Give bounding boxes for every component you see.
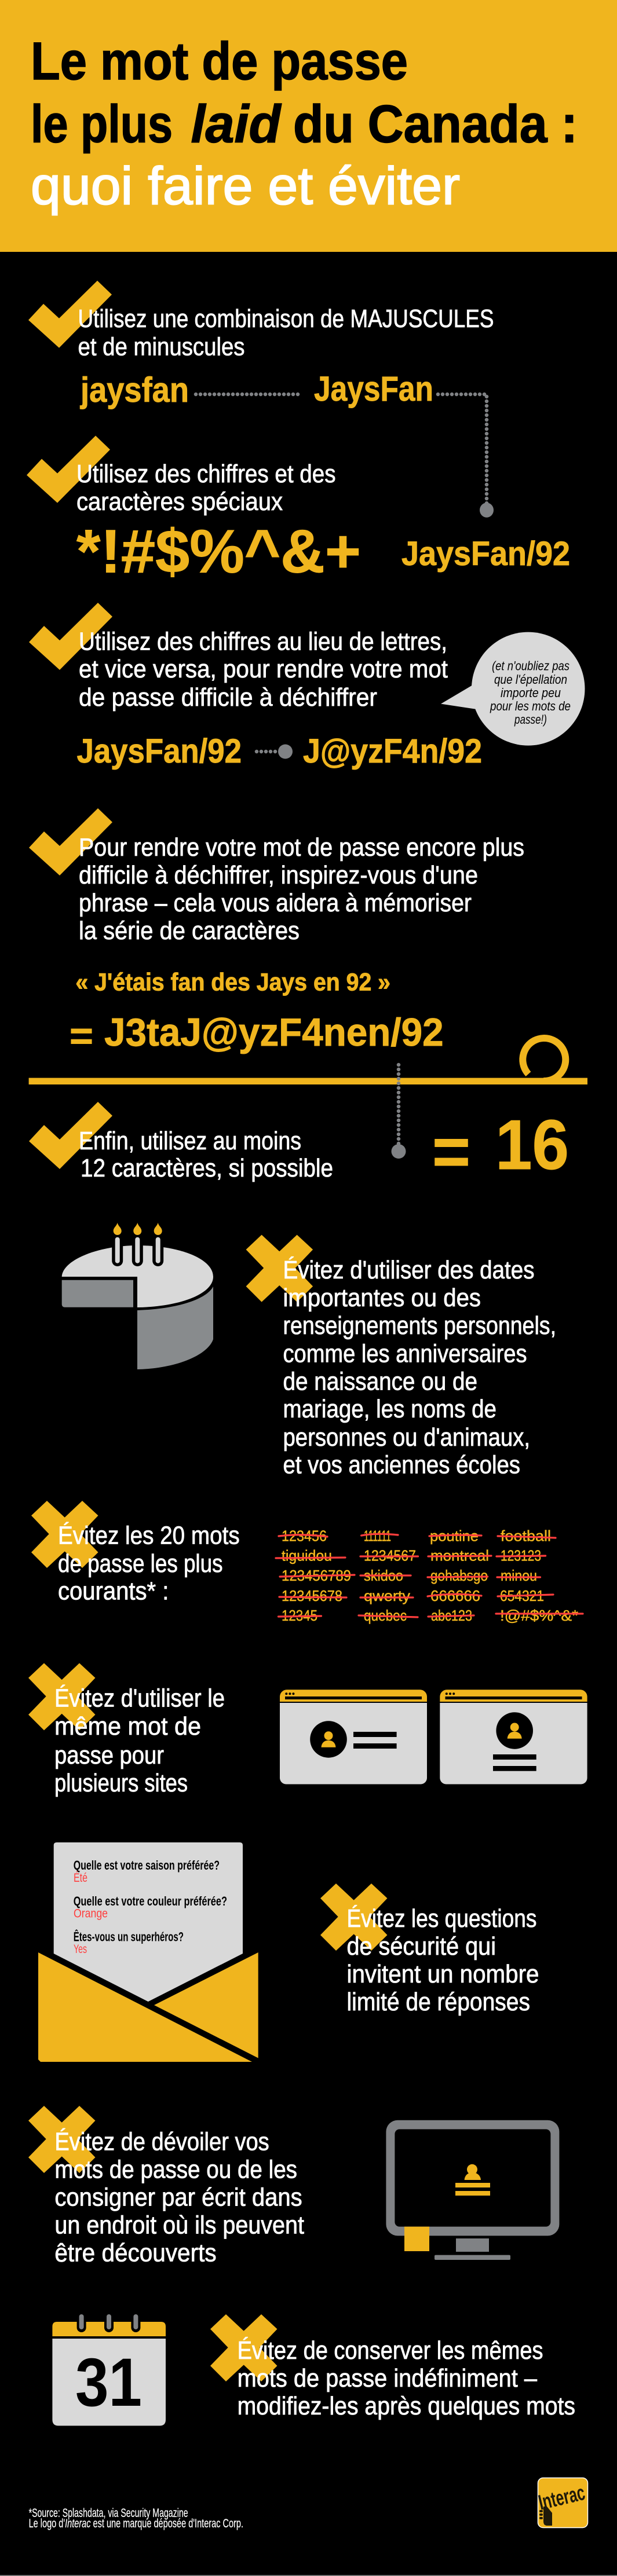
- tip text: Évitez de dévoiler vos: [54, 2127, 269, 2156]
- icon: X mark: [320, 1884, 387, 1951]
- tip text: mots de passe indéfiniment –: [238, 2364, 537, 2392]
- tip text: invitent un nombre: [346, 1960, 539, 1988]
- icon: browser window 2: [440, 1690, 587, 1784]
- tip text: Utilisez des chiffres au lieu de lettres,: [79, 628, 447, 655]
- source footnote: Le logo d'Interac est une marque déposée d'Interac Corp.: [29, 2517, 243, 2530]
- crossed-out password list: poutine: [430, 1527, 479, 1545]
- tip text: de passe difficile à déchiffrer: [79, 683, 377, 712]
- crossed-out password list: football: [501, 1527, 551, 1545]
- crossed-out password list: gohabsgo: [430, 1567, 488, 1584]
- special characters: *!#$%^&+: [76, 518, 361, 586]
- big number 16: [432, 1105, 569, 1190]
- tip text: et vice versa, pour rendre votre mot: [79, 655, 448, 683]
- title: [31, 32, 578, 216]
- tip text: mots de passe ou de les: [54, 2155, 297, 2184]
- tip 1: uppercase and lowercase: [28, 281, 494, 518]
- tip text: [79, 833, 524, 945]
- tip text: [54, 2127, 304, 2267]
- quote phrase: « J'étais fan des Jays en 92 »: [75, 968, 390, 996]
- tip text: [54, 1684, 225, 1797]
- Interac logo: Interac: [536, 2480, 587, 2515]
- example: JaysFan/92: JaysFan/92: [401, 535, 570, 573]
- icon: birthday cake: [62, 1223, 213, 1369]
- tip text: de sécurité qui: [346, 1932, 496, 1961]
- title: quoi faire et éviter: [31, 157, 460, 216]
- tip text: phrase – cela vous aidera à mémoriser: [79, 889, 472, 917]
- tip text: consigner par écrit dans: [54, 2183, 302, 2212]
- crossed-out password list: 123456789: [282, 1567, 351, 1584]
- example: JaysFan/92: JaysFan/92: [76, 732, 242, 770]
- questionnaire text: Yes: [74, 1943, 87, 1956]
- example: jaysfan: jaysfan: [80, 371, 189, 409]
- questionnaire text: Orange: [74, 1907, 108, 1921]
- title: Le mot de passe: [31, 32, 408, 91]
- speech bubble: passe!): [514, 712, 547, 727]
- key-ring divider line: [29, 1038, 587, 1084]
- icon: X mark: [246, 1235, 313, 1302]
- Interac logo: [536, 2478, 587, 2528]
- icon: X mark: [28, 1663, 95, 1730]
- icon: X mark: [28, 2106, 95, 2173]
- crossed-out password list: minou: [501, 1567, 537, 1584]
- crossed-out password list: 654321: [500, 1587, 544, 1604]
- icon: check mark: [29, 1102, 112, 1169]
- crossed-out password list: [276, 1527, 583, 1624]
- dotted connector: [392, 1065, 406, 1159]
- tip text: [78, 305, 494, 361]
- avoid 1: dates and personal information: [62, 1223, 556, 1479]
- crossed-out password list: 666666: [430, 1587, 480, 1604]
- icon: X mark: [31, 1501, 98, 1568]
- tip text: plusieurs sites: [54, 1769, 188, 1797]
- tip text: comme les anniversaires: [283, 1340, 527, 1368]
- speech bubble: (et n'oubliez pas: [492, 659, 569, 673]
- tip text: être découverts: [54, 2239, 217, 2267]
- avoid 3: same password on several sites: [28, 1663, 587, 1797]
- title: le plus: [31, 95, 173, 154]
- password result: =: [70, 1014, 93, 1058]
- crossed-out password list: 123456: [282, 1527, 327, 1545]
- tip text: Évitez les 20 mots: [58, 1522, 240, 1549]
- crossed-out password list: 12345: [282, 1607, 317, 1624]
- icon: check mark: [29, 808, 112, 875]
- tip text: Pour rendre votre mot de passe encore plus: [79, 833, 524, 862]
- crossed-out password list: abc123: [431, 1607, 472, 1624]
- header banner: [0, 0, 617, 252]
- tip text: et vos anciennes écoles: [283, 1451, 520, 1479]
- tip text: même mot de: [54, 1712, 201, 1740]
- tip text: Utilisez des chiffres et des: [76, 460, 336, 488]
- tip text: et de minuscules: [78, 332, 244, 361]
- avoid 2: common passwords: [31, 1501, 583, 1624]
- questionnaire text: Quelle est votre saison préférée?: [74, 1858, 220, 1873]
- crossed-out password list: skidoo: [364, 1567, 403, 1584]
- crossed-out password list: montreal: [430, 1547, 489, 1564]
- example: JaysFan: JaysFan: [314, 369, 433, 408]
- tip text: [346, 1904, 539, 2016]
- tip text: [283, 1256, 556, 1479]
- tip text: Évitez les questions: [346, 1904, 536, 1933]
- icon: computer monitor with sticky note: [386, 2120, 559, 2260]
- icon: check mark: [27, 435, 110, 503]
- questionnaire text: [74, 1858, 227, 1956]
- dotted arrow: [257, 745, 293, 758]
- avoid 5: revealing or writing down passwords: [28, 2106, 559, 2267]
- icon: browser window 1: [280, 1690, 427, 1784]
- tip text: mariage, les noms de: [283, 1395, 496, 1423]
- dotted arrow: [196, 393, 301, 396]
- tip text: caractères spéciaux: [76, 488, 283, 516]
- crossed-out password list: 1234567: [364, 1547, 416, 1564]
- tip text: Évitez de conserver les mêmes: [238, 2336, 543, 2365]
- dotted connector to JaysFan/92: [438, 394, 494, 518]
- icon: check mark: [28, 281, 112, 348]
- crossed-out password list: 111111: [364, 1527, 391, 1545]
- tip 2: numbers and special characters: [27, 435, 570, 586]
- tip text: importantes ou des: [283, 1284, 481, 1312]
- crossed-out password list: quebec: [364, 1607, 407, 1624]
- tip text: Évitez d'utiliser des dates: [283, 1256, 534, 1284]
- icon: calendar: [52, 2314, 166, 2426]
- tip text: passe pour: [54, 1741, 164, 1769]
- tip text: [58, 1522, 240, 1606]
- big number 16: 16: [495, 1105, 569, 1184]
- avoid 4: security questions: [38, 1842, 539, 2062]
- tip text: 12 caractères, si possible: [81, 1154, 333, 1182]
- tip text: de passe les plus: [58, 1549, 222, 1578]
- crossed-out password list: qwerty: [364, 1587, 410, 1604]
- icon: calendar: 31: [75, 2344, 142, 2421]
- tip text: courants* :: [58, 1577, 169, 1606]
- icon: envelope with questionnaire: [38, 1842, 258, 2062]
- icon: X mark: [210, 2314, 277, 2381]
- source footnote: *Source: Splashdata, via Security Magazine: [29, 2507, 188, 2520]
- tip text: Enfin, utilisez au moins: [79, 1127, 301, 1155]
- crossed-out password list: tiguidou: [282, 1547, 332, 1564]
- crossed-out password list: 12345678: [282, 1587, 342, 1604]
- tip text: [79, 1127, 333, 1182]
- speech bubble: pour les mots de: [490, 699, 571, 713]
- tip text: limité de réponses: [346, 1988, 530, 2016]
- title: laid: [191, 95, 282, 154]
- tip text: [79, 628, 448, 712]
- speech bubble: [441, 632, 585, 746]
- title: du Canada :: [293, 95, 578, 154]
- tip text: difficile à déchiffrer, inspirez-vous d'une: [79, 861, 478, 889]
- tip text: Utilisez une combinaison de MAJUSCULES: [78, 305, 494, 333]
- questionnaire text: Été: [74, 1871, 87, 1885]
- speech bubble: importe peu: [501, 686, 561, 700]
- password result: J3taJ@yzF4nen/92: [104, 1010, 444, 1054]
- tip 5: at least 12 characters: [29, 1065, 569, 1190]
- tip 3: numbers instead of letters: [29, 603, 585, 770]
- tip text: [238, 2336, 575, 2420]
- tip 4: use a phrase: [29, 808, 524, 1058]
- tip text: renseignements personnels,: [283, 1311, 556, 1340]
- source footnote: [29, 2507, 243, 2530]
- questionnaire text: Êtes-vous un superhéros?: [74, 1930, 184, 1944]
- big number 16: =: [432, 1113, 470, 1190]
- avoid 6: keeping same passwords forever: [52, 2314, 575, 2426]
- tip text: la série de caractères: [79, 917, 300, 945]
- tip text: personnes ou d'animaux,: [283, 1423, 530, 1452]
- tip text: de naissance ou de: [283, 1368, 477, 1395]
- crossed-out password list: !@#$%^&*: [500, 1607, 578, 1624]
- icon: check mark: [29, 603, 112, 670]
- crossed-out password list: 123123: [501, 1547, 541, 1564]
- example: J@yzF4n/92: J@yzF4n/92: [303, 732, 482, 770]
- speech bubble: que l'épellation: [494, 672, 567, 687]
- tip text: modifiez-les après quelques mots: [238, 2392, 575, 2420]
- tip text: un endroit où ils peuvent: [54, 2211, 304, 2240]
- tip text: Évitez d'utiliser le: [54, 1684, 225, 1713]
- questionnaire text: Quelle est votre couleur préférée?: [74, 1894, 227, 1908]
- tip text: [76, 460, 336, 516]
